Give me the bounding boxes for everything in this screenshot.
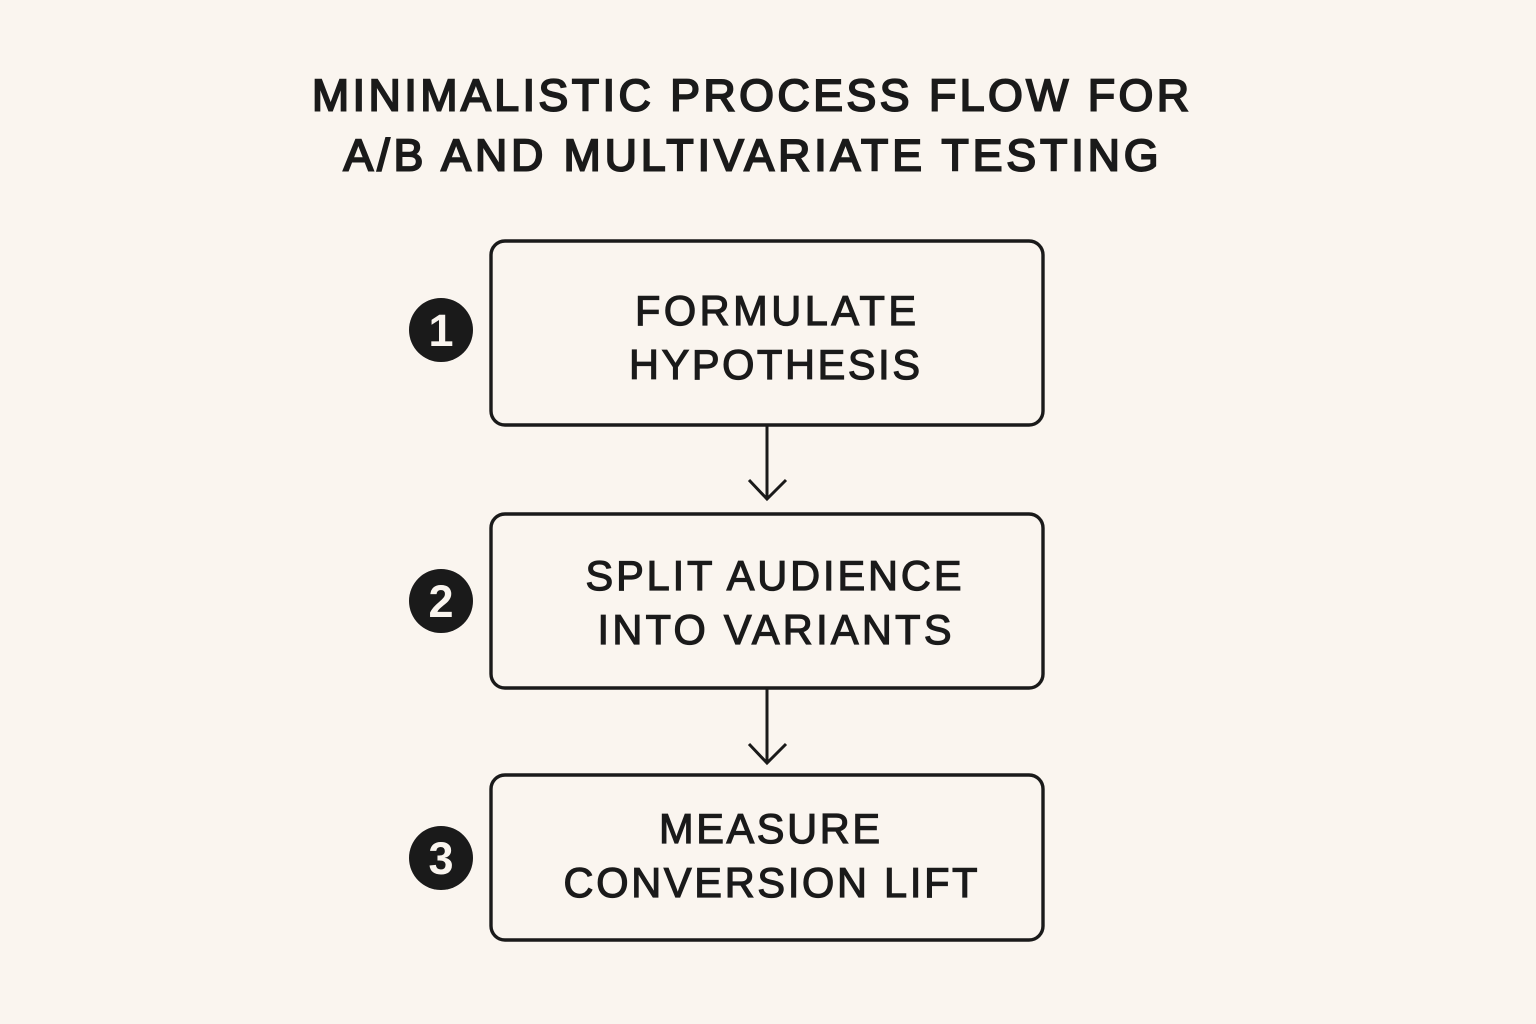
step 1 box: FORMULATE	[635, 287, 916, 334]
step 3 box: MEASURE	[659, 805, 880, 852]
step 2 badge	[409, 569, 473, 633]
title: MINIMALISTIC PROCESS FLOW FOR	[312, 72, 1189, 120]
step 2 box: SPLIT AUDIENCE	[586, 552, 962, 599]
step 3 badge: 3	[428, 833, 454, 884]
step 1 badge: 1	[428, 305, 454, 356]
arrow 1 to 2	[749, 425, 786, 499]
title	[312, 72, 1189, 180]
arrow 2 to 3	[749, 688, 786, 763]
title: A/B AND MULTIVARIATE TESTING	[344, 132, 1158, 180]
step 2 box: INTO VARIANTS	[598, 606, 952, 653]
step 1 box	[491, 241, 1043, 425]
step 1 box: HYPOTHESIS	[629, 341, 920, 388]
step 3 box	[491, 775, 1043, 940]
step 2 box	[491, 514, 1043, 688]
step 2 badge: 2	[428, 576, 454, 627]
step 1 badge	[409, 298, 473, 362]
step 3 box: CONVERSION LIFT	[564, 859, 978, 906]
step 3 badge	[409, 826, 473, 890]
